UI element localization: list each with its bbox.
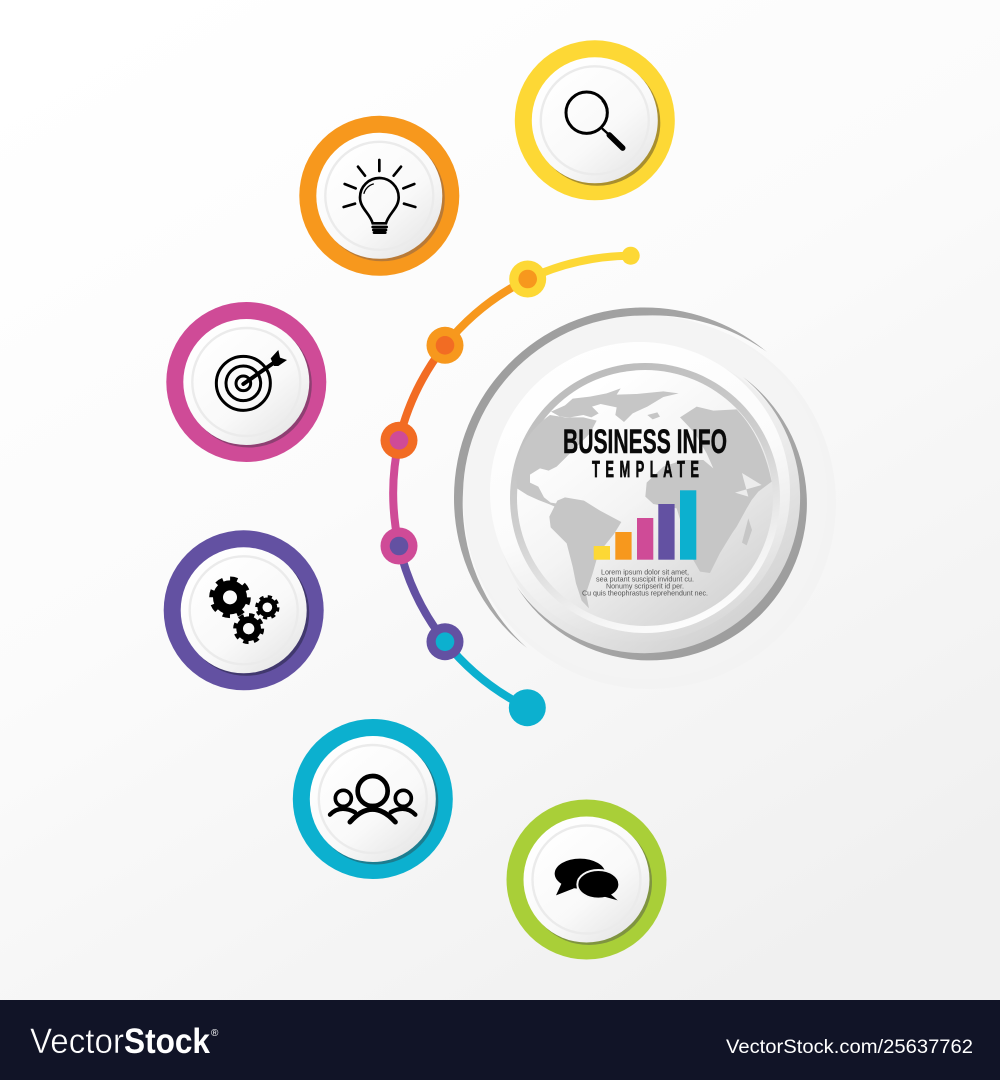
end node bbox=[509, 689, 546, 726]
inner face bbox=[495, 349, 805, 659]
footer logo: Vector bbox=[30, 1022, 124, 1061]
panel: team badge bbox=[293, 719, 453, 879]
body text bbox=[582, 568, 708, 598]
globe ring bbox=[510, 363, 780, 633]
footer logo: Stock bbox=[124, 1022, 210, 1061]
yellow segment bbox=[528, 256, 631, 279]
icon: gears bbox=[212, 579, 278, 642]
purple segment bbox=[399, 546, 445, 642]
white inner ring bbox=[490, 342, 790, 642]
pink node bbox=[380, 528, 418, 564]
madagascar bbox=[742, 518, 752, 545]
panel: search badge bbox=[515, 40, 675, 200]
yellow node bbox=[509, 260, 546, 298]
panel: central globe badge bbox=[454, 307, 836, 689]
subtitle: template: TEMPLATE bbox=[592, 457, 699, 483]
icon: speech bubbles bbox=[555, 859, 619, 900]
icon: target and arrow bbox=[216, 350, 287, 410]
greenland and north atlantic land bbox=[551, 388, 679, 422]
north and central america bbox=[516, 415, 597, 507]
south america bbox=[549, 497, 621, 608]
footer logo bbox=[30, 1022, 219, 1061]
body text: Cu quis theophrastus reprehendunt nec. bbox=[582, 588, 708, 598]
base face bbox=[463, 315, 827, 679]
panel: chat badge bbox=[506, 800, 666, 960]
footer logo: ® bbox=[211, 1028, 219, 1039]
orange segment bbox=[445, 279, 528, 345]
panel: target badge bbox=[166, 302, 326, 462]
pink segment bbox=[393, 440, 399, 546]
eurasia and africa bbox=[645, 407, 772, 573]
panel: idea badge bbox=[299, 116, 459, 276]
small island bbox=[647, 412, 660, 419]
orange node bbox=[426, 327, 464, 364]
teal segment bbox=[445, 642, 527, 708]
panel: gears badge bbox=[164, 530, 324, 690]
icon: three people bbox=[330, 776, 415, 822]
purple node bbox=[426, 623, 464, 660]
bar chart bbox=[594, 490, 696, 560]
footer id: VectorStock.com/25637762 bbox=[726, 1037, 973, 1058]
body text: sea putant suscipit invidunt cu. bbox=[596, 574, 694, 584]
dark orange node bbox=[380, 422, 418, 459]
icon: light bulb bbox=[344, 160, 415, 233]
dark orange segment bbox=[399, 345, 445, 440]
start node bbox=[622, 247, 640, 265]
timeline arc bbox=[380, 247, 640, 726]
soft halo bbox=[464, 317, 836, 689]
world map bbox=[516, 388, 772, 608]
title: business info: BUSINESS INFO bbox=[563, 423, 727, 461]
footer bar bbox=[0, 1000, 1000, 1080]
right crescent ring bbox=[517, 377, 807, 660]
body text: Nonumy scripserit id per. bbox=[606, 582, 684, 590]
arabian sliver bbox=[735, 473, 762, 497]
left crescent ring bbox=[454, 307, 767, 648]
body text: Lorem ipsum dolor sit amet, bbox=[601, 568, 689, 576]
icon: magnifying glass bbox=[566, 92, 623, 148]
globe disc bbox=[517, 370, 773, 626]
